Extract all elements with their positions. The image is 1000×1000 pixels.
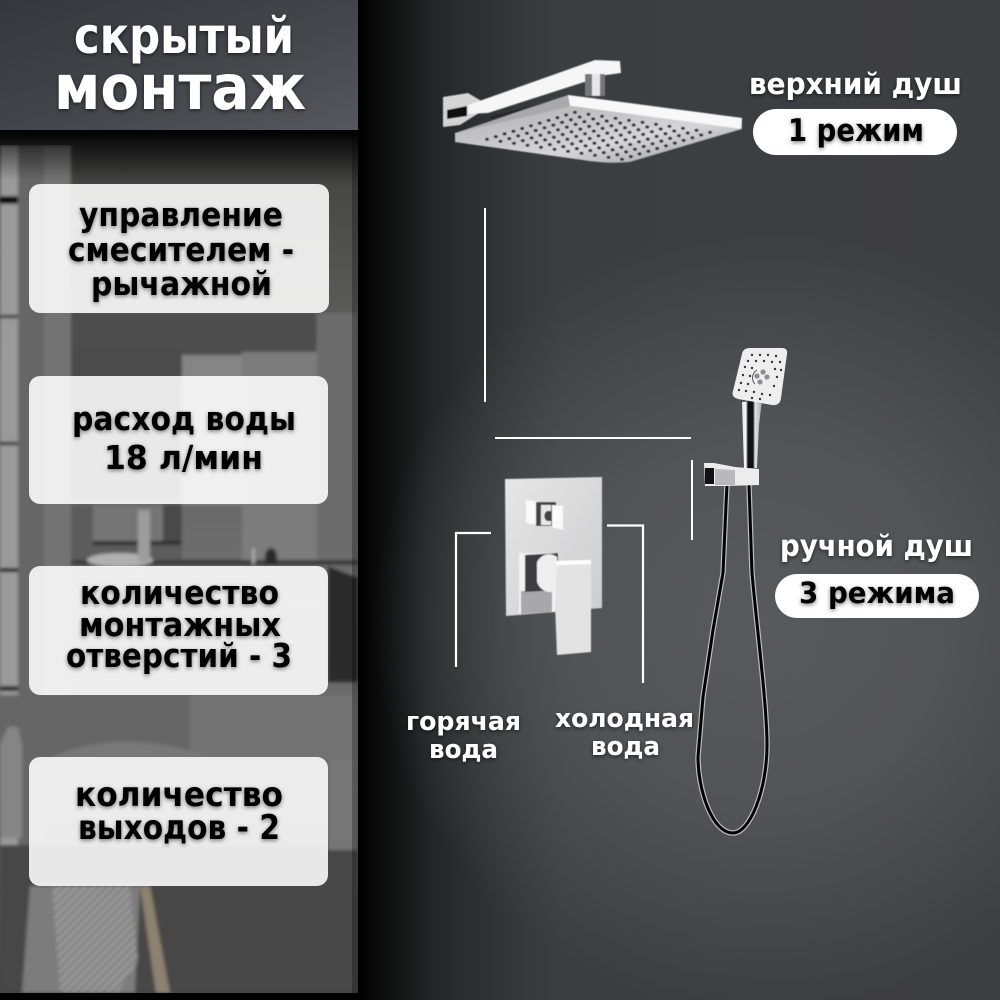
label: hot water [406,707,521,765]
card: water flow [29,376,328,504]
diverter button [526,500,563,530]
label: hot water: вода [429,735,498,765]
label: top shower: верхний душ [749,67,962,101]
hand shower with hose [698,348,787,833]
card: control type: смесителем - [68,230,294,269]
head top band [568,95,742,129]
card: outlets [29,757,328,886]
title text: монтаж [54,51,306,124]
pill: 3 modes [775,574,979,618]
card: control type: управление [79,195,283,234]
label: cold water: холодная [555,704,694,734]
wall background [358,0,1000,1000]
label: cold water: вода [591,732,660,762]
label: cold water [555,704,694,762]
lever handle [555,560,591,655]
card: mounting holes [29,566,328,695]
head body [455,95,742,163]
mixer plate [505,477,602,616]
left background photo: bathroom interior [0,130,358,1000]
label: hot water: горячая [406,707,521,737]
wall bracket [704,463,759,486]
card: mounting holes: количество [80,573,279,612]
head face [455,106,741,162]
pill: 1 mode [753,109,957,155]
arm [468,60,621,114]
hose [698,485,767,833]
drop pipe [585,74,605,96]
title text: скрытый [74,7,294,65]
wall flange [443,93,490,127]
connector lines [484,208,693,540]
card: control type [29,184,329,313]
card: control type: рычажной [91,264,272,303]
card: water flow: 18 л/мин [104,438,263,477]
card: water flow: расход воды [72,399,296,438]
title banner [0,0,358,130]
bracket: hot water [456,533,491,667]
bracket: cold water [607,526,643,683]
label: hand shower: ручной душ [780,529,973,563]
pill: 3 modes: 3 режима [799,576,955,610]
lever base [519,553,558,614]
card: outlets: количество [75,775,283,815]
card: outlets: выходов - 2 [78,808,280,848]
rain shower head [443,60,742,163]
handle [742,400,762,468]
label: top shower [749,67,962,155]
pill: 1 mode: 1 режим [788,113,924,149]
label: hand shower [775,529,979,618]
spray head [733,348,787,405]
card: mounting holes: монтажных [79,605,281,644]
mixer [505,477,602,655]
title text [54,7,306,124]
card: mounting holes: отверстий - 3 [66,636,292,675]
nozzle holes [485,111,712,161]
